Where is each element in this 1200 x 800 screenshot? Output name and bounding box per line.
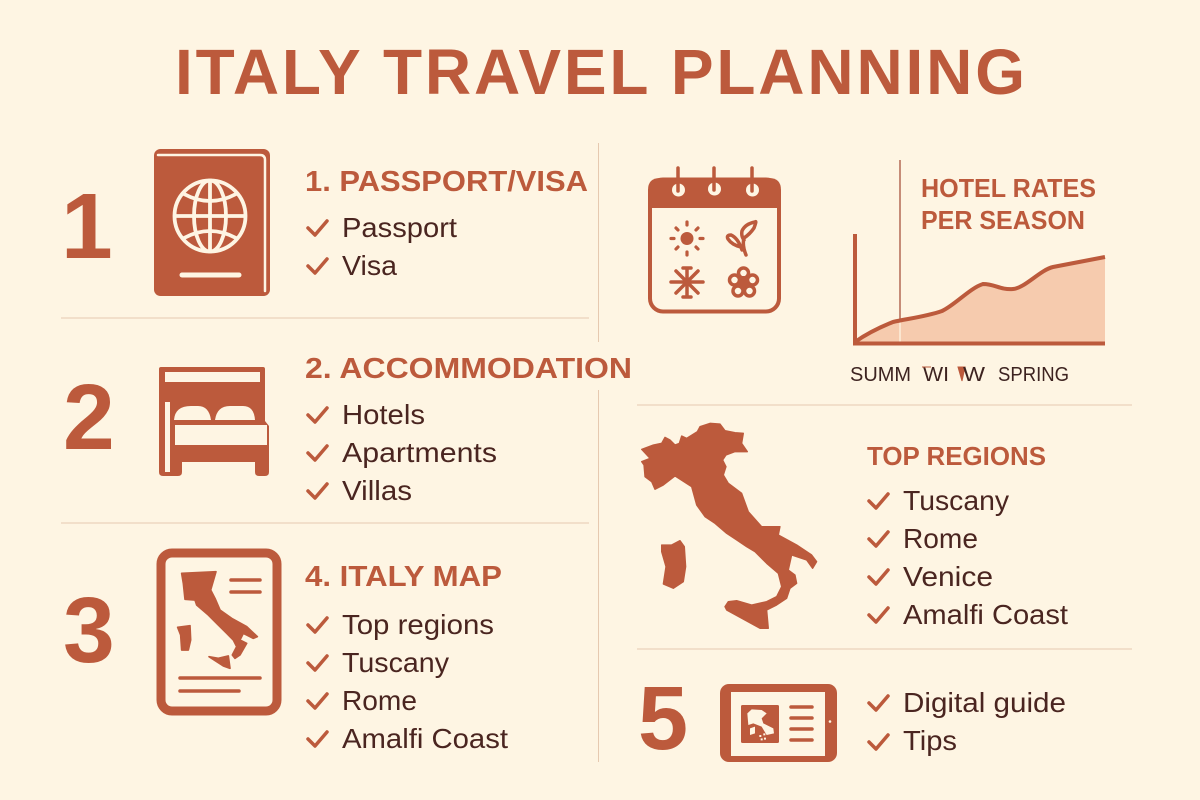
icon: flower — [730, 268, 758, 296]
panel: seasons and hotel rates — [648, 160, 1105, 386]
icon: passport — [154, 150, 270, 296]
chart title: HOTEL RATES — [921, 173, 1096, 203]
checklist: Italy map items — [308, 609, 508, 754]
heading: accommodation: 2. ACCOMMODATION — [305, 353, 632, 385]
checklist: Italy map items: Rome — [342, 685, 417, 716]
chart axis labels: WI — [923, 364, 949, 386]
checklist: accommodation items: Hotels — [342, 399, 425, 430]
map of Italy — [642, 423, 817, 628]
step number 1: 1 — [61, 174, 113, 278]
heading: passport/visa: 1. PASSPORT/VISA — [305, 166, 588, 198]
checklist: digital guide items: Tips — [903, 725, 957, 756]
checklist: Italy map items: Amalfi Coast — [342, 723, 508, 754]
checklist: passport items: Passport — [342, 212, 457, 243]
chart title — [921, 173, 1096, 235]
panel: digital guide — [638, 669, 1066, 769]
checklist: accommodation items — [308, 399, 497, 506]
icon: sun — [671, 222, 703, 255]
checklist: regions: Amalfi Coast — [903, 599, 1068, 630]
checklist: Italy map items: Top regions — [342, 609, 494, 640]
icon: bed — [159, 367, 269, 476]
icon: snowflake — [671, 268, 703, 297]
checklist: Italy map items: Tuscany — [342, 647, 449, 678]
chart title: PER SEASON — [921, 205, 1085, 235]
checklist: regions: Tuscany — [903, 485, 1009, 516]
chart axis labels — [850, 364, 1069, 386]
checklist: regions: Venice — [903, 561, 993, 592]
panel: Italy map checklist — [63, 553, 508, 754]
checklist: regions: Rome — [903, 523, 978, 554]
step number 5: 5 — [638, 669, 688, 769]
panel: top regions — [642, 423, 1068, 630]
icon: map document — [161, 553, 277, 711]
heading: top regions: TOP REGIONS — [867, 441, 1046, 471]
panel: accommodation — [63, 353, 632, 506]
chart: hotel rates per season — [850, 160, 1105, 386]
chart axis labels: SUMM — [850, 364, 911, 386]
chart axis labels: SPRING — [998, 364, 1069, 386]
heading: Italy map: 4. ITALY MAP — [305, 561, 502, 593]
title: ITALY TRAVEL PLANNING — [175, 36, 1025, 108]
checklist: regions — [869, 485, 1068, 630]
checklist: passport items: Visa — [342, 250, 397, 281]
chart axis labels: W — [963, 364, 985, 386]
checklist: accommodation items: Apartments — [342, 437, 497, 468]
icon: seasonal calendar — [648, 168, 781, 312]
icon: tablet — [720, 684, 837, 762]
checklist: digital guide items — [869, 687, 1066, 756]
icon: leaf sprout — [727, 222, 756, 255]
checklist: digital guide items: Digital guide — [903, 687, 1066, 718]
panel: passport and visa — [61, 150, 588, 296]
step number 3: 3 — [63, 578, 115, 682]
checklist: accommodation items: Villas — [342, 475, 412, 506]
checklist: passport items — [308, 212, 457, 281]
step number 2: 2 — [63, 365, 115, 469]
